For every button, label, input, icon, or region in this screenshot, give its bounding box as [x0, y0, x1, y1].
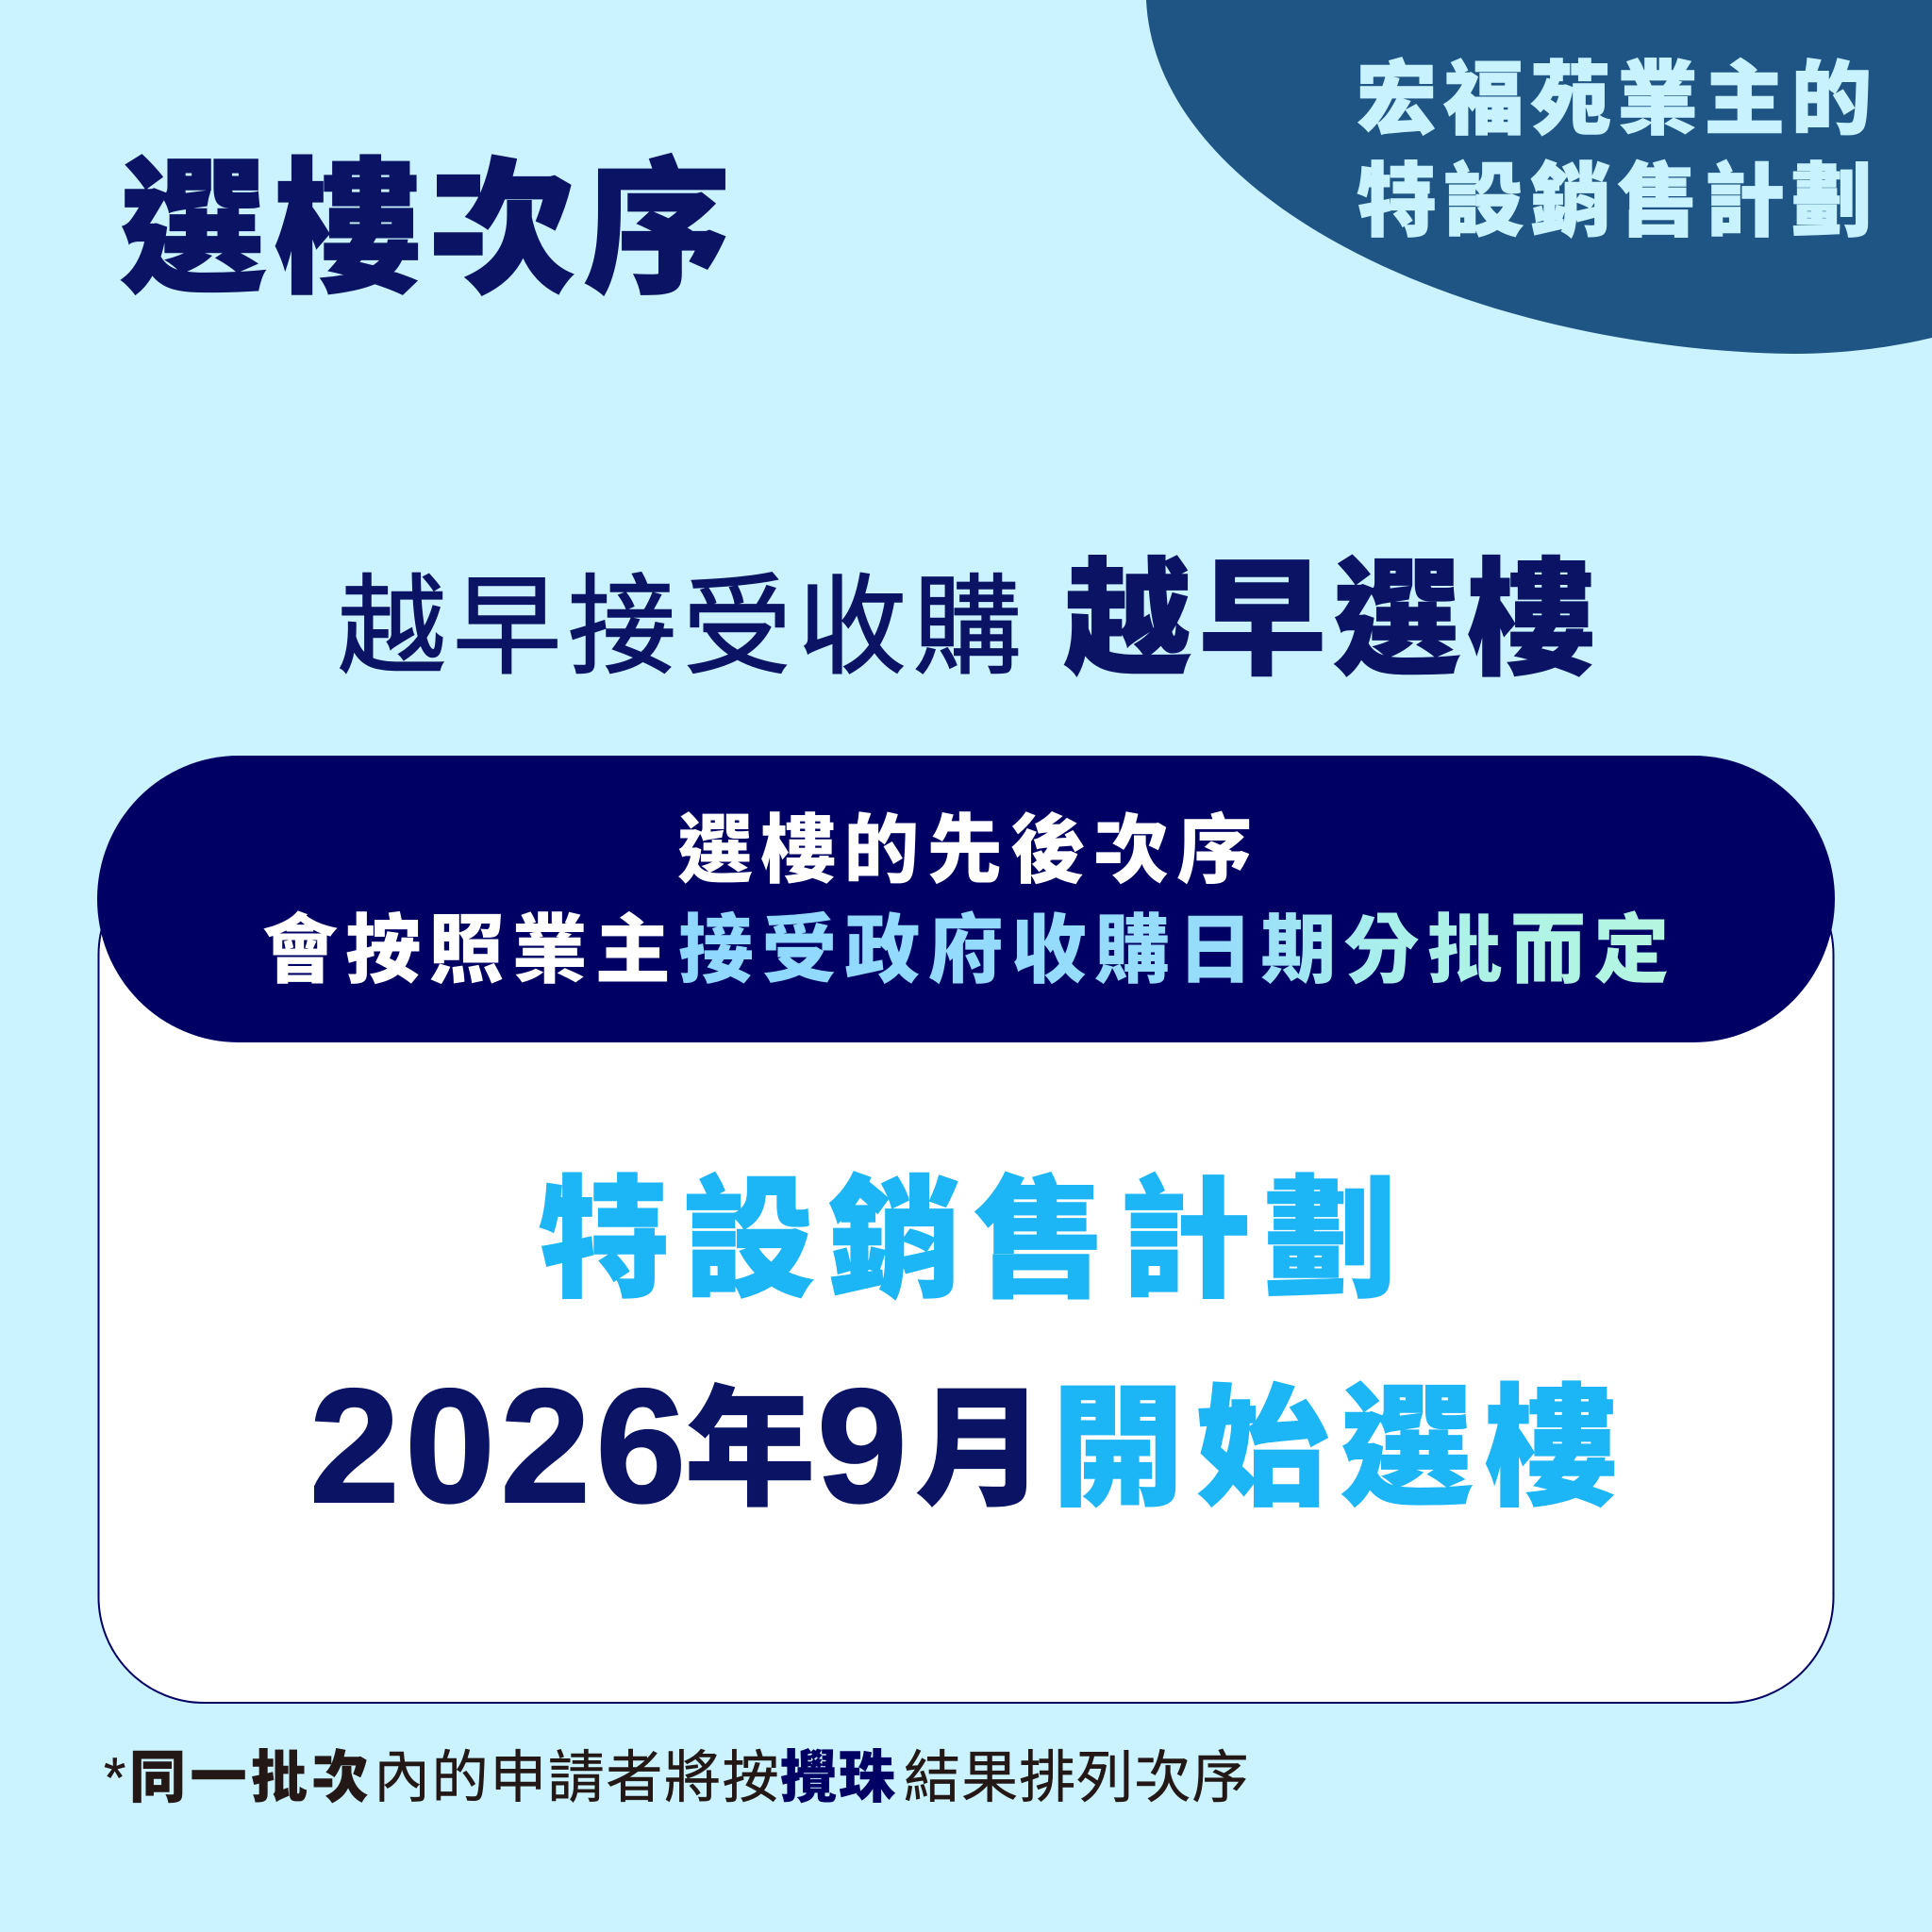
panel: selection order [97, 756, 1835, 1703]
date line [309, 1356, 1629, 1537]
date line: 9 [817, 1356, 908, 1537]
footnote: 同一批次 [129, 1746, 373, 1809]
date line: 2026 [309, 1356, 691, 1537]
subheading: earlier acceptance, earlier selection: 越早選樓 [1064, 549, 1602, 691]
date line: 月 [915, 1377, 1045, 1523]
date line: 開始選樓 [1052, 1374, 1629, 1523]
programme name: 特設銷售計劃 [538, 1166, 1409, 1314]
footnote: * [104, 1746, 127, 1809]
header text [262, 808, 1676, 992]
panel body [98, 849, 1834, 1703]
label: programme name [1357, 56, 1878, 247]
header text: 選樓的先後次序 [677, 808, 1259, 892]
label: programme name: 特設銷售計劃 [1357, 158, 1878, 247]
title: 選樓次序 [120, 148, 739, 311]
subheading: earlier acceptance, earlier selection [338, 549, 1602, 691]
header text: 會按照業主接受政府收購日期分批而定 [262, 908, 1676, 992]
date line: 年 [685, 1377, 815, 1523]
label: programme name: 宏福苑業主的 [1357, 56, 1878, 145]
footnote: 攪珠 [780, 1746, 896, 1809]
panel header [97, 756, 1835, 1042]
corner blob with programme label [1146, 0, 1932, 354]
footnote: 內的申請者將按 [374, 1746, 780, 1809]
footnote: 結果排列次序 [904, 1746, 1250, 1809]
subheading: earlier acceptance, earlier selection: 越早接受收購 [338, 567, 1028, 688]
